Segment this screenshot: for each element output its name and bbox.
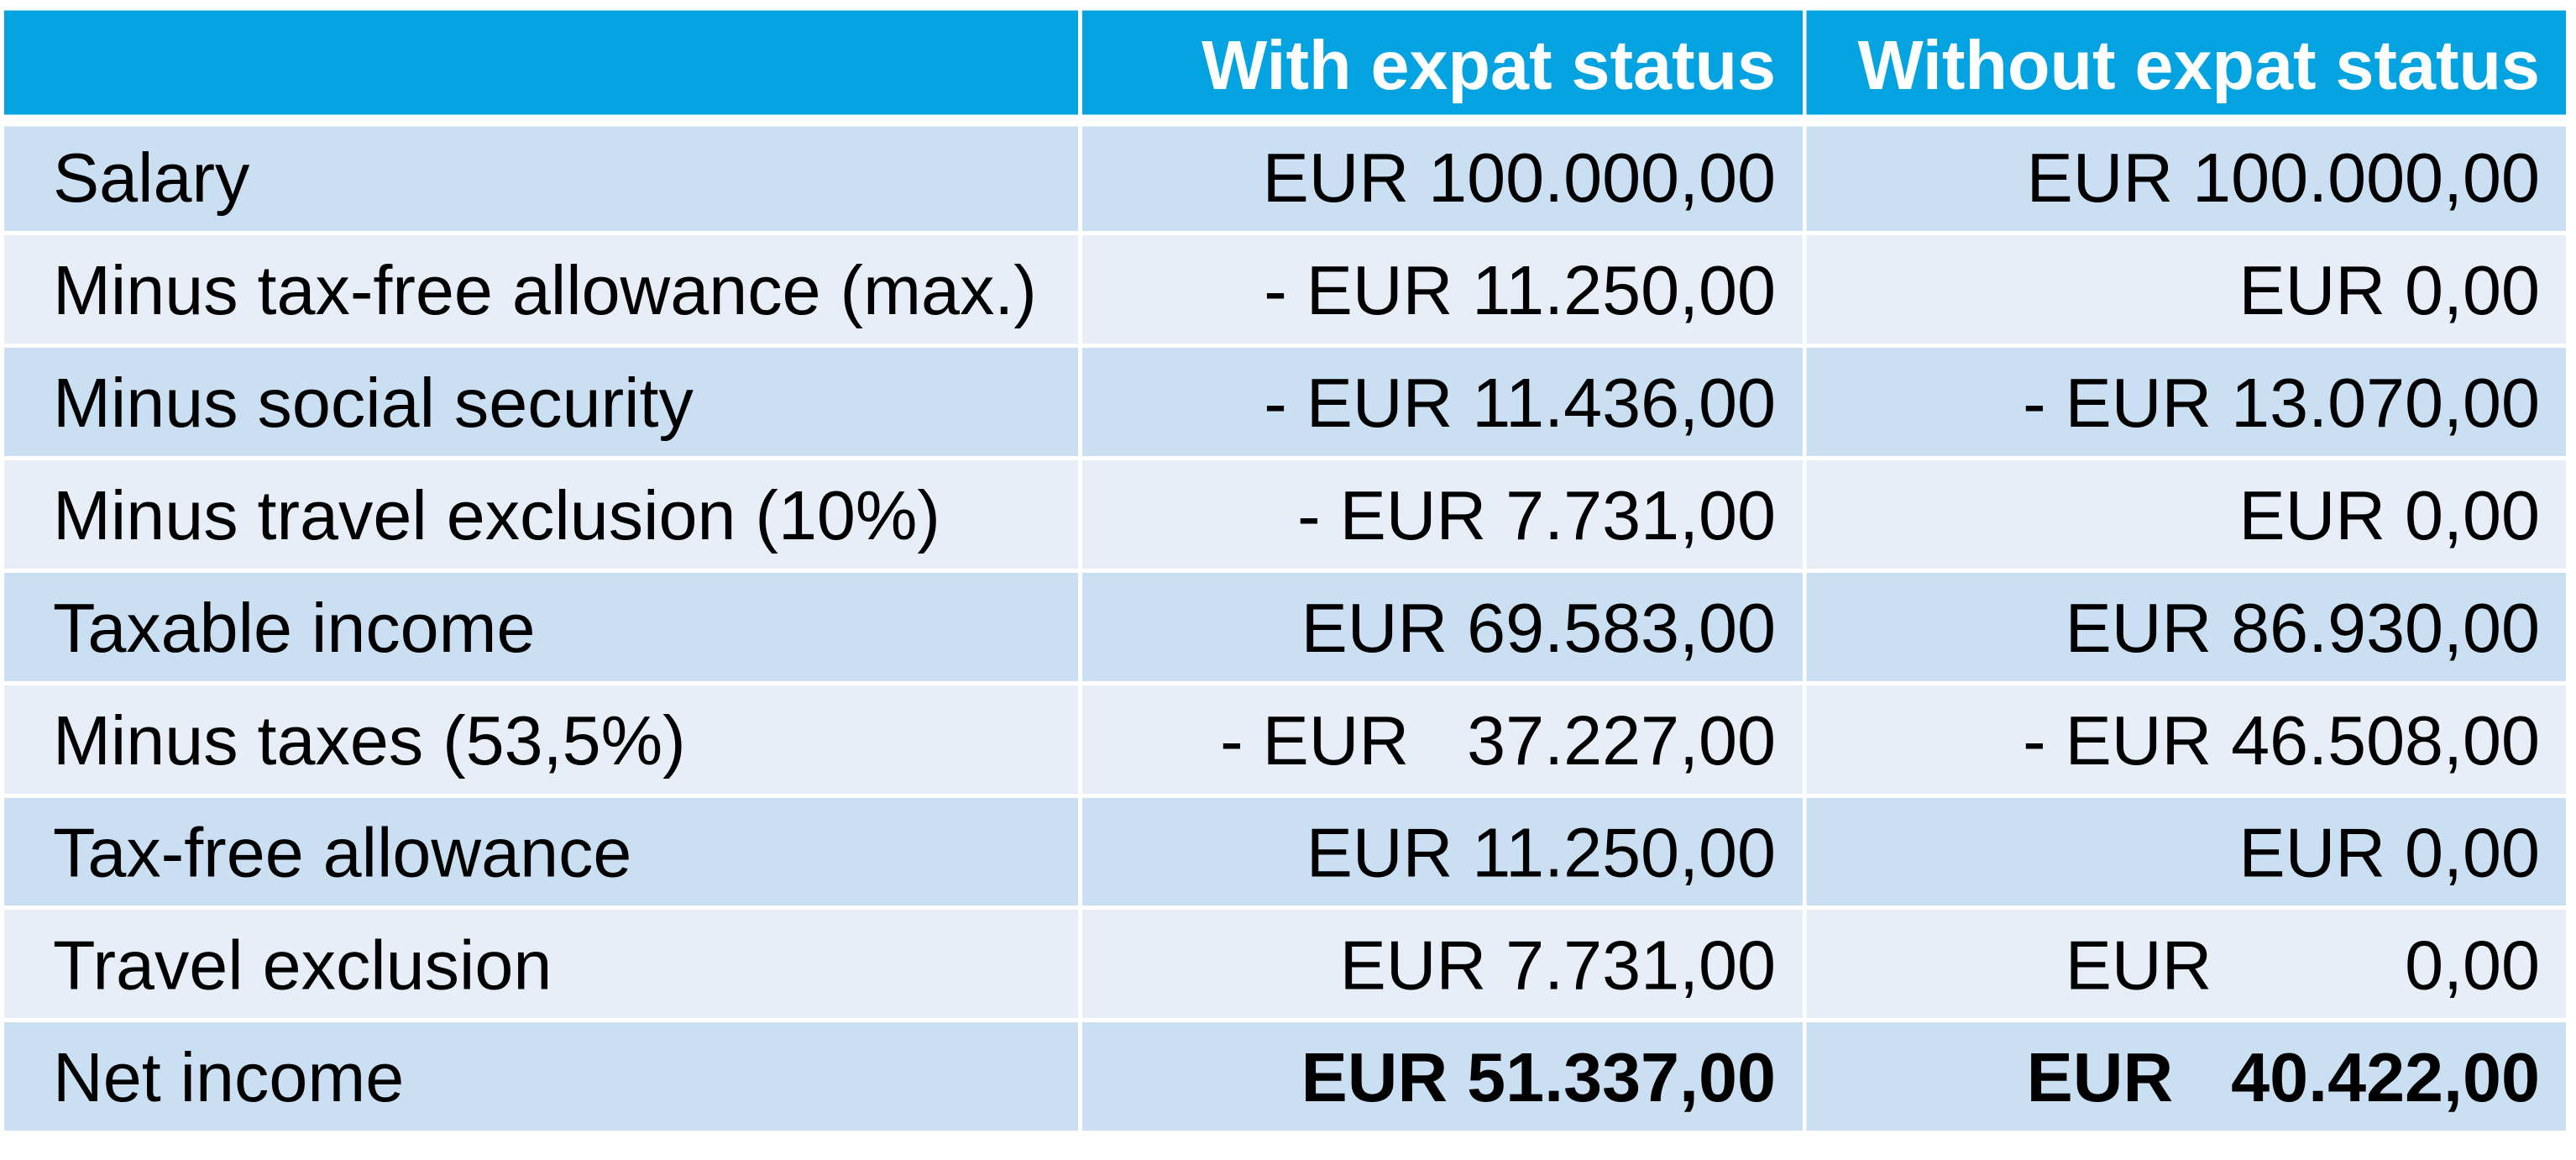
row: travel exclusion: EUR 0,00 (2066, 926, 2540, 1005)
row: minus taxes (4, 685, 2566, 794)
row: travel exclusion: Travel exclusion (53, 926, 552, 1005)
row: minus tax-free allowance (4, 235, 2566, 344)
row: net income: EUR 51.337,00 (1301, 1038, 1776, 1116)
row: minus social security: - EUR 11.436,00 (1264, 364, 1776, 442)
row: minus taxes: Minus taxes (53,5%) (53, 701, 686, 779)
row: salary: EUR 100.000,00 (2027, 139, 2540, 217)
row: minus travel exclusion: Minus travel exclusion (10%) (53, 476, 940, 554)
row: taxable income (4, 573, 2566, 681)
row: minus social security (4, 348, 2566, 456)
header row (4, 10, 2566, 114)
row: tax-free allowance: Tax-free allowance (53, 813, 631, 892)
row: minus tax-free allowance: EUR 0,00 (2238, 251, 2540, 329)
row: minus social security: Minus social security (53, 364, 694, 442)
row: minus social security: - EUR 13.070,00 (2023, 364, 2540, 442)
row: minus tax-free allowance: Minus tax-free allowance (max.) (53, 251, 1037, 329)
row: taxable income: Taxable income (53, 589, 536, 667)
row: salary: EUR 100.000,00 (1263, 139, 1776, 217)
row: taxable income: EUR 86.930,00 (2066, 589, 2540, 667)
row: net income: EUR 40.422,00 (2027, 1038, 2540, 1116)
row: salary (4, 126, 2566, 231)
row: tax-free allowance: EUR 0,00 (2238, 813, 2540, 892)
row: minus travel exclusion (4, 460, 2566, 569)
row: net income (4, 1022, 2566, 1131)
row: net income: Net income (53, 1038, 404, 1116)
row: minus tax-free allowance: - EUR 11.250,00 (1264, 251, 1776, 329)
row: salary: Salary (53, 139, 250, 217)
row: minus travel exclusion: EUR 0,00 (2238, 476, 2540, 554)
row: tax-free allowance: EUR 11.250,00 (1306, 813, 1776, 892)
row: minus taxes: - EUR 46.508,00 (2023, 701, 2540, 779)
row: travel exclusion (4, 910, 2566, 1018)
row: minus travel exclusion: - EUR 7.731,00 (1297, 476, 1776, 554)
header row: With expat status (1202, 26, 1776, 104)
row: minus taxes: - EUR 37.227,00 (1220, 701, 1776, 779)
row: taxable income: EUR 69.583,00 (1301, 589, 1776, 667)
row: travel exclusion: EUR 7.731,00 (1340, 926, 1776, 1005)
row: tax-free allowance (4, 798, 2566, 905)
header row: Without expat status (1858, 26, 2540, 104)
